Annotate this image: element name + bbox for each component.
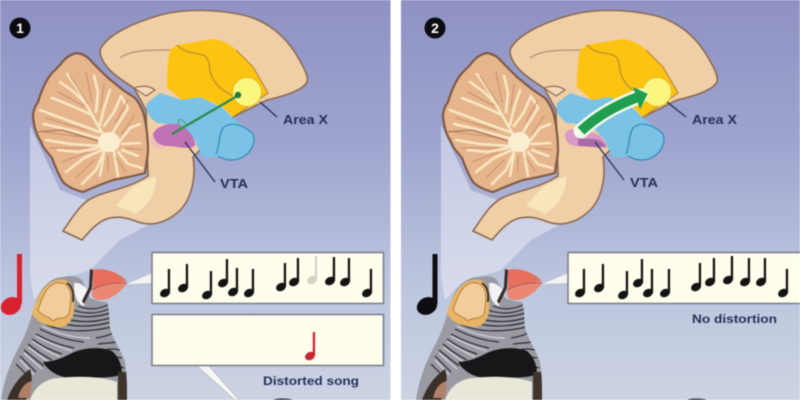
Area X label with leader <box>667 102 738 127</box>
VTA: pink region <box>565 129 607 148</box>
brain: yellow region with Area X <box>167 39 268 117</box>
panel 2: no distortion <box>414 10 800 400</box>
top song box: notes <box>152 252 384 304</box>
brain: cerebrum and brainstem <box>473 10 717 240</box>
VTA: purple region <box>151 124 195 148</box>
thin green pathway <box>172 92 241 134</box>
badge 2: 2 <box>431 20 439 36</box>
zebra finch <box>416 269 542 400</box>
caption: no distortion: No distortion <box>692 312 777 326</box>
caption: distorted song: Distorted song <box>263 374 359 388</box>
Area X label with leader <box>260 102 329 127</box>
song bubble tail <box>127 273 153 284</box>
badge 2 <box>424 18 446 38</box>
Area X label with leader: Area X <box>692 113 738 127</box>
brain: cerebrum and brainstem <box>63 10 307 240</box>
VTA label with leader: VTA <box>630 176 658 190</box>
dark shape at bottom edge <box>687 398 706 400</box>
thick green arrow with glow <box>581 88 647 131</box>
icon: big black note <box>414 254 440 318</box>
VTA label with leader: VTA <box>220 177 248 191</box>
VTA label with leader <box>595 142 658 190</box>
cerebellum <box>443 53 558 192</box>
icon: big red note <box>0 254 24 318</box>
brain: yellow region with Area X <box>577 39 678 117</box>
song box: notes <box>568 252 800 304</box>
panel 1: distorted song <box>0 10 384 400</box>
brain: blue region <box>556 93 664 160</box>
dark shape at bottom edge <box>273 398 292 400</box>
light cone from bird to brain <box>30 125 150 300</box>
badge 1 <box>10 18 30 38</box>
lower song box with red note <box>152 314 384 400</box>
panel 1 background <box>0 0 390 400</box>
cerebellum <box>33 53 148 192</box>
panel 2 background <box>401 0 800 400</box>
badge 1: 1 <box>16 20 24 36</box>
Area X label with leader: Area X <box>283 113 329 127</box>
VTA label with leader <box>185 142 248 191</box>
brain: blue region <box>146 93 254 160</box>
light cone from bird to brain <box>441 125 561 300</box>
song bubble tail <box>542 273 569 284</box>
zebra finch <box>1 269 127 400</box>
